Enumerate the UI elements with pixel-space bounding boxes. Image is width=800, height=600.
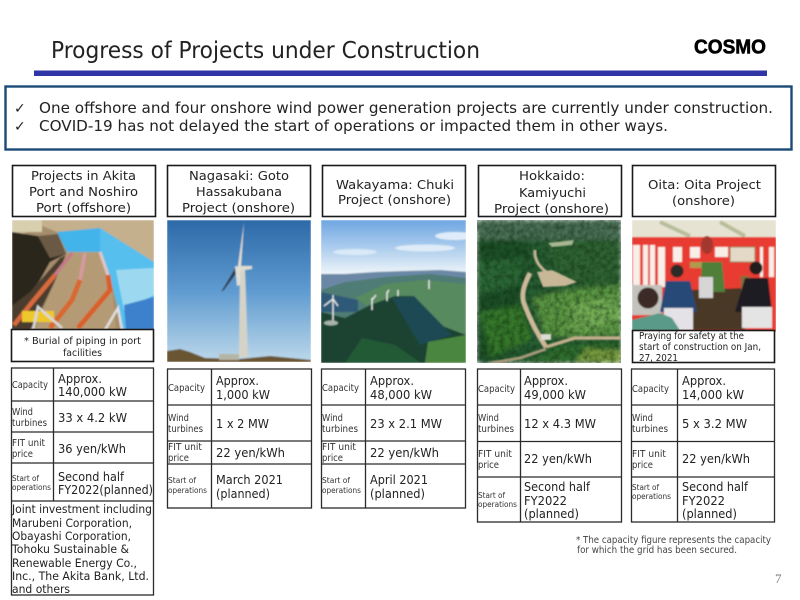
table: Oita specs: Wind — [632, 413, 653, 424]
table: Hokkaido specs: Wind — [478, 413, 499, 424]
table: Oita specs: Start of — [632, 483, 659, 492]
table: Nagasaki specs: (planned) — [216, 486, 270, 501]
table: Hokkaido specs: Capacity — [478, 384, 515, 395]
table: Akita and Noshiro specs — [11, 368, 153, 596]
table: Oita specs: Second half — [682, 479, 749, 494]
photo: single wind turbine — [167, 220, 311, 362]
heading: Oita: Oita: Oita Project — [648, 177, 761, 192]
table: Nagasaki specs: operations — [168, 486, 207, 495]
table: Oita specs: Capacity — [632, 384, 669, 395]
heading: Akita and Noshiro: Projects in Akita — [31, 168, 136, 183]
table: Wakayama specs: Approx. — [370, 373, 414, 388]
table: Nagasaki specs: Wind — [168, 413, 189, 424]
note: joint investors: Marubeni Corporation, — [12, 516, 132, 530]
table: Hokkaido specs: Start of — [478, 491, 505, 500]
table: Akita and Noshiro specs: 140,000 kW — [58, 384, 127, 399]
table: Oita specs: 14,000 kW — [682, 387, 744, 402]
table: Oita specs: FIT unit — [632, 449, 666, 460]
table: Hokkaido specs: operations — [478, 500, 517, 509]
table: Hokkaido specs — [478, 369, 622, 522]
table: Wakayama specs: operations — [322, 486, 361, 495]
title: Progress of Projects under Construction — [51, 38, 480, 64]
caption: praying for safety: start of construction on Jan, — [639, 342, 761, 353]
footnote: capacity: * The capacity figure represents the capacity — [576, 535, 771, 546]
table: Oita specs: FY2022 — [682, 493, 725, 508]
note: joint investors: Inc., The Akita Bank, Ltd. — [12, 569, 149, 583]
note: joint investors: Joint investment including — [11, 502, 152, 516]
logo: COSMO: COSMO — [694, 36, 766, 58]
heading: Nagasaki: Project (onshore) — [182, 200, 295, 215]
table: Oita specs: 22 yen/kWh — [682, 451, 750, 466]
note: joint investors: and others — [12, 582, 70, 596]
table: Hokkaido specs: 22 yen/kWh — [524, 451, 592, 466]
bullet: projects under construction: One offshore and four onshore wind power generation projects are currently under construction. — [39, 99, 773, 117]
heading: Hokkaido: Hokkaido: — [519, 168, 585, 183]
table: Nagasaki specs: Start of — [168, 476, 196, 485]
table: Akita and Noshiro specs: turbines — [12, 418, 47, 429]
heading: Nagasaki: Hassakubana — [196, 184, 282, 199]
table: Akita and Noshiro specs: Wind — [12, 407, 33, 418]
table: Akita and Noshiro specs: operations — [12, 483, 51, 492]
table: Hokkaido specs: (planned) — [524, 506, 579, 521]
heading: Nagasaki — [168, 166, 310, 216]
table: Oita specs: price — [632, 460, 653, 471]
note: joint investors: Renewable Energy Co., — [12, 556, 137, 570]
table: Akita and Noshiro specs: FY2022(planned) — [58, 482, 153, 497]
table: Wakayama specs: 48,000 kW — [370, 387, 432, 402]
table: Hokkaido specs: turbines — [478, 424, 514, 435]
table: Akita and Noshiro specs: Start of — [12, 474, 39, 483]
table: Hokkaido specs: FIT unit — [478, 449, 512, 460]
panel: Hokkaido Kamiyuchi — [477, 166, 622, 522]
table: Hokkaido specs: price — [478, 460, 499, 471]
heading: Wakayama — [322, 166, 466, 216]
table: Wakayama specs: turbines — [322, 424, 358, 435]
heading: Wakayama: Project (onshore) — [338, 192, 451, 207]
table: Wakayama specs: (planned) — [370, 486, 425, 501]
heading: Hokkaido: Project (onshore) — [494, 201, 609, 216]
table: Nagasaki specs: 22 yen/kWh — [216, 445, 285, 460]
note: joint investors: Obayashi Corporation, — [12, 529, 131, 543]
table: Wakayama specs: 23 x 2.1 MW — [370, 416, 442, 431]
panel: Oita Project — [632, 166, 776, 522]
photo: ridge wind farm — [321, 220, 475, 363]
table: Wakayama specs: FIT unit — [322, 442, 356, 453]
bullet: COVID-19 impact: COVID-19 has not delayed the start of operations or impacted them in other ways. — [39, 117, 668, 135]
table: Akita and Noshiro specs: Capacity — [12, 380, 48, 391]
heading: Oita: (onshore) — [672, 193, 735, 208]
table: Hokkaido specs: Approx. — [524, 373, 568, 388]
heading: Akita and Noshiro: Port (offshore) — [36, 200, 131, 215]
photo: piping burial trench — [12, 220, 154, 330]
table: Akita and Noshiro specs: Approx. — [58, 371, 102, 386]
caption: praying for safety — [632, 330, 774, 364]
table: Hokkaido specs: Second half — [524, 479, 591, 494]
panel: key messages — [6, 86, 792, 150]
page number: 7 — [775, 571, 782, 586]
heading: Akita and Noshiro — [12, 166, 156, 216]
footnote: capacity: for which the grid has been secured. — [577, 545, 737, 556]
table: Oita specs — [632, 369, 774, 522]
table: Nagasaki specs: March 2021 — [216, 472, 283, 487]
heading: Hokkaido — [478, 166, 622, 216]
caption: praying for safety: Praying for safety at the — [639, 331, 744, 342]
table: Nagasaki specs: FIT unit — [168, 442, 202, 453]
table: Hokkaido specs: 49,000 kW — [524, 387, 586, 402]
heading: Wakayama: Wakayama: Chuki — [336, 177, 454, 192]
caption: burial of piping: * Burial of piping in port — [24, 336, 141, 347]
table: Nagasaki specs: Approx. — [216, 373, 259, 388]
panel: Akita and Noshiro — [11, 166, 155, 596]
heading: Nagasaki: Nagasaki: Goto — [189, 168, 289, 183]
title rule — [34, 70, 767, 76]
footnote: capacity — [576, 535, 771, 556]
table: Oita specs: operations — [632, 492, 671, 501]
table: Wakayama specs: Capacity — [322, 383, 359, 394]
table: Wakayama specs: 22 yen/kWh — [370, 445, 439, 460]
table: Akita and Noshiro specs: 33 x 4.2 kW — [58, 410, 127, 425]
table: Nagasaki specs: 1 x 2 MW — [216, 416, 269, 431]
table: Oita specs: turbines — [632, 424, 668, 435]
table: Akita and Noshiro specs: Second half — [58, 469, 125, 484]
table: Nagasaki specs: turbines — [168, 424, 203, 435]
heading: Hokkaido: Kamiyuchi — [519, 185, 586, 200]
table: Wakayama specs: price — [322, 453, 343, 464]
table: Wakayama specs: Wind — [322, 413, 343, 424]
caption: burial of piping: facilities — [63, 348, 102, 359]
table: Nagasaki specs: 1,000 kW — [216, 387, 270, 402]
panel: Wakayama Chuki — [321, 166, 475, 508]
table: Wakayama specs — [322, 369, 466, 508]
table: Nagasaki specs: Capacity — [168, 383, 205, 394]
panel: Nagasaki Goto Hassakubana — [167, 166, 312, 508]
table: Hokkaido specs: FY2022 — [524, 493, 567, 508]
forest texture — [477, 220, 621, 363]
table: Nagasaki specs: price — [168, 453, 189, 464]
caption: praying for safety: 27, 2021 — [639, 353, 678, 364]
heading: Akita and Noshiro: Port and Noshiro — [29, 184, 138, 199]
heading: Oita — [632, 166, 776, 216]
table: Oita specs: (planned) — [682, 506, 737, 521]
table: Akita and Noshiro specs: price — [12, 449, 33, 460]
table: Oita specs: Approx. — [682, 373, 726, 388]
note: joint investors: Tohoku Sustainable & — [11, 542, 129, 556]
bullet: COVID-19 impact: ✓ — [14, 119, 26, 135]
photo: safety prayer ceremony — [632, 220, 776, 332]
photo: aerial forest road — [477, 220, 621, 363]
table: Nagasaki specs — [168, 369, 312, 508]
bullet: projects under construction: ✓ — [14, 101, 26, 117]
caption: burial of piping — [12, 330, 154, 362]
table: Hokkaido specs: 12 x 4.3 MW — [524, 416, 596, 431]
note: joint investors — [11, 502, 152, 596]
table: Wakayama specs: April 2021 — [370, 472, 428, 487]
table: Wakayama specs: Start of — [322, 476, 350, 485]
table: Akita and Noshiro specs: FIT unit — [12, 438, 45, 449]
table: Akita and Noshiro specs: 36 yen/kWh — [58, 441, 126, 456]
table: Oita specs: 5 x 3.2 MW — [682, 416, 747, 431]
